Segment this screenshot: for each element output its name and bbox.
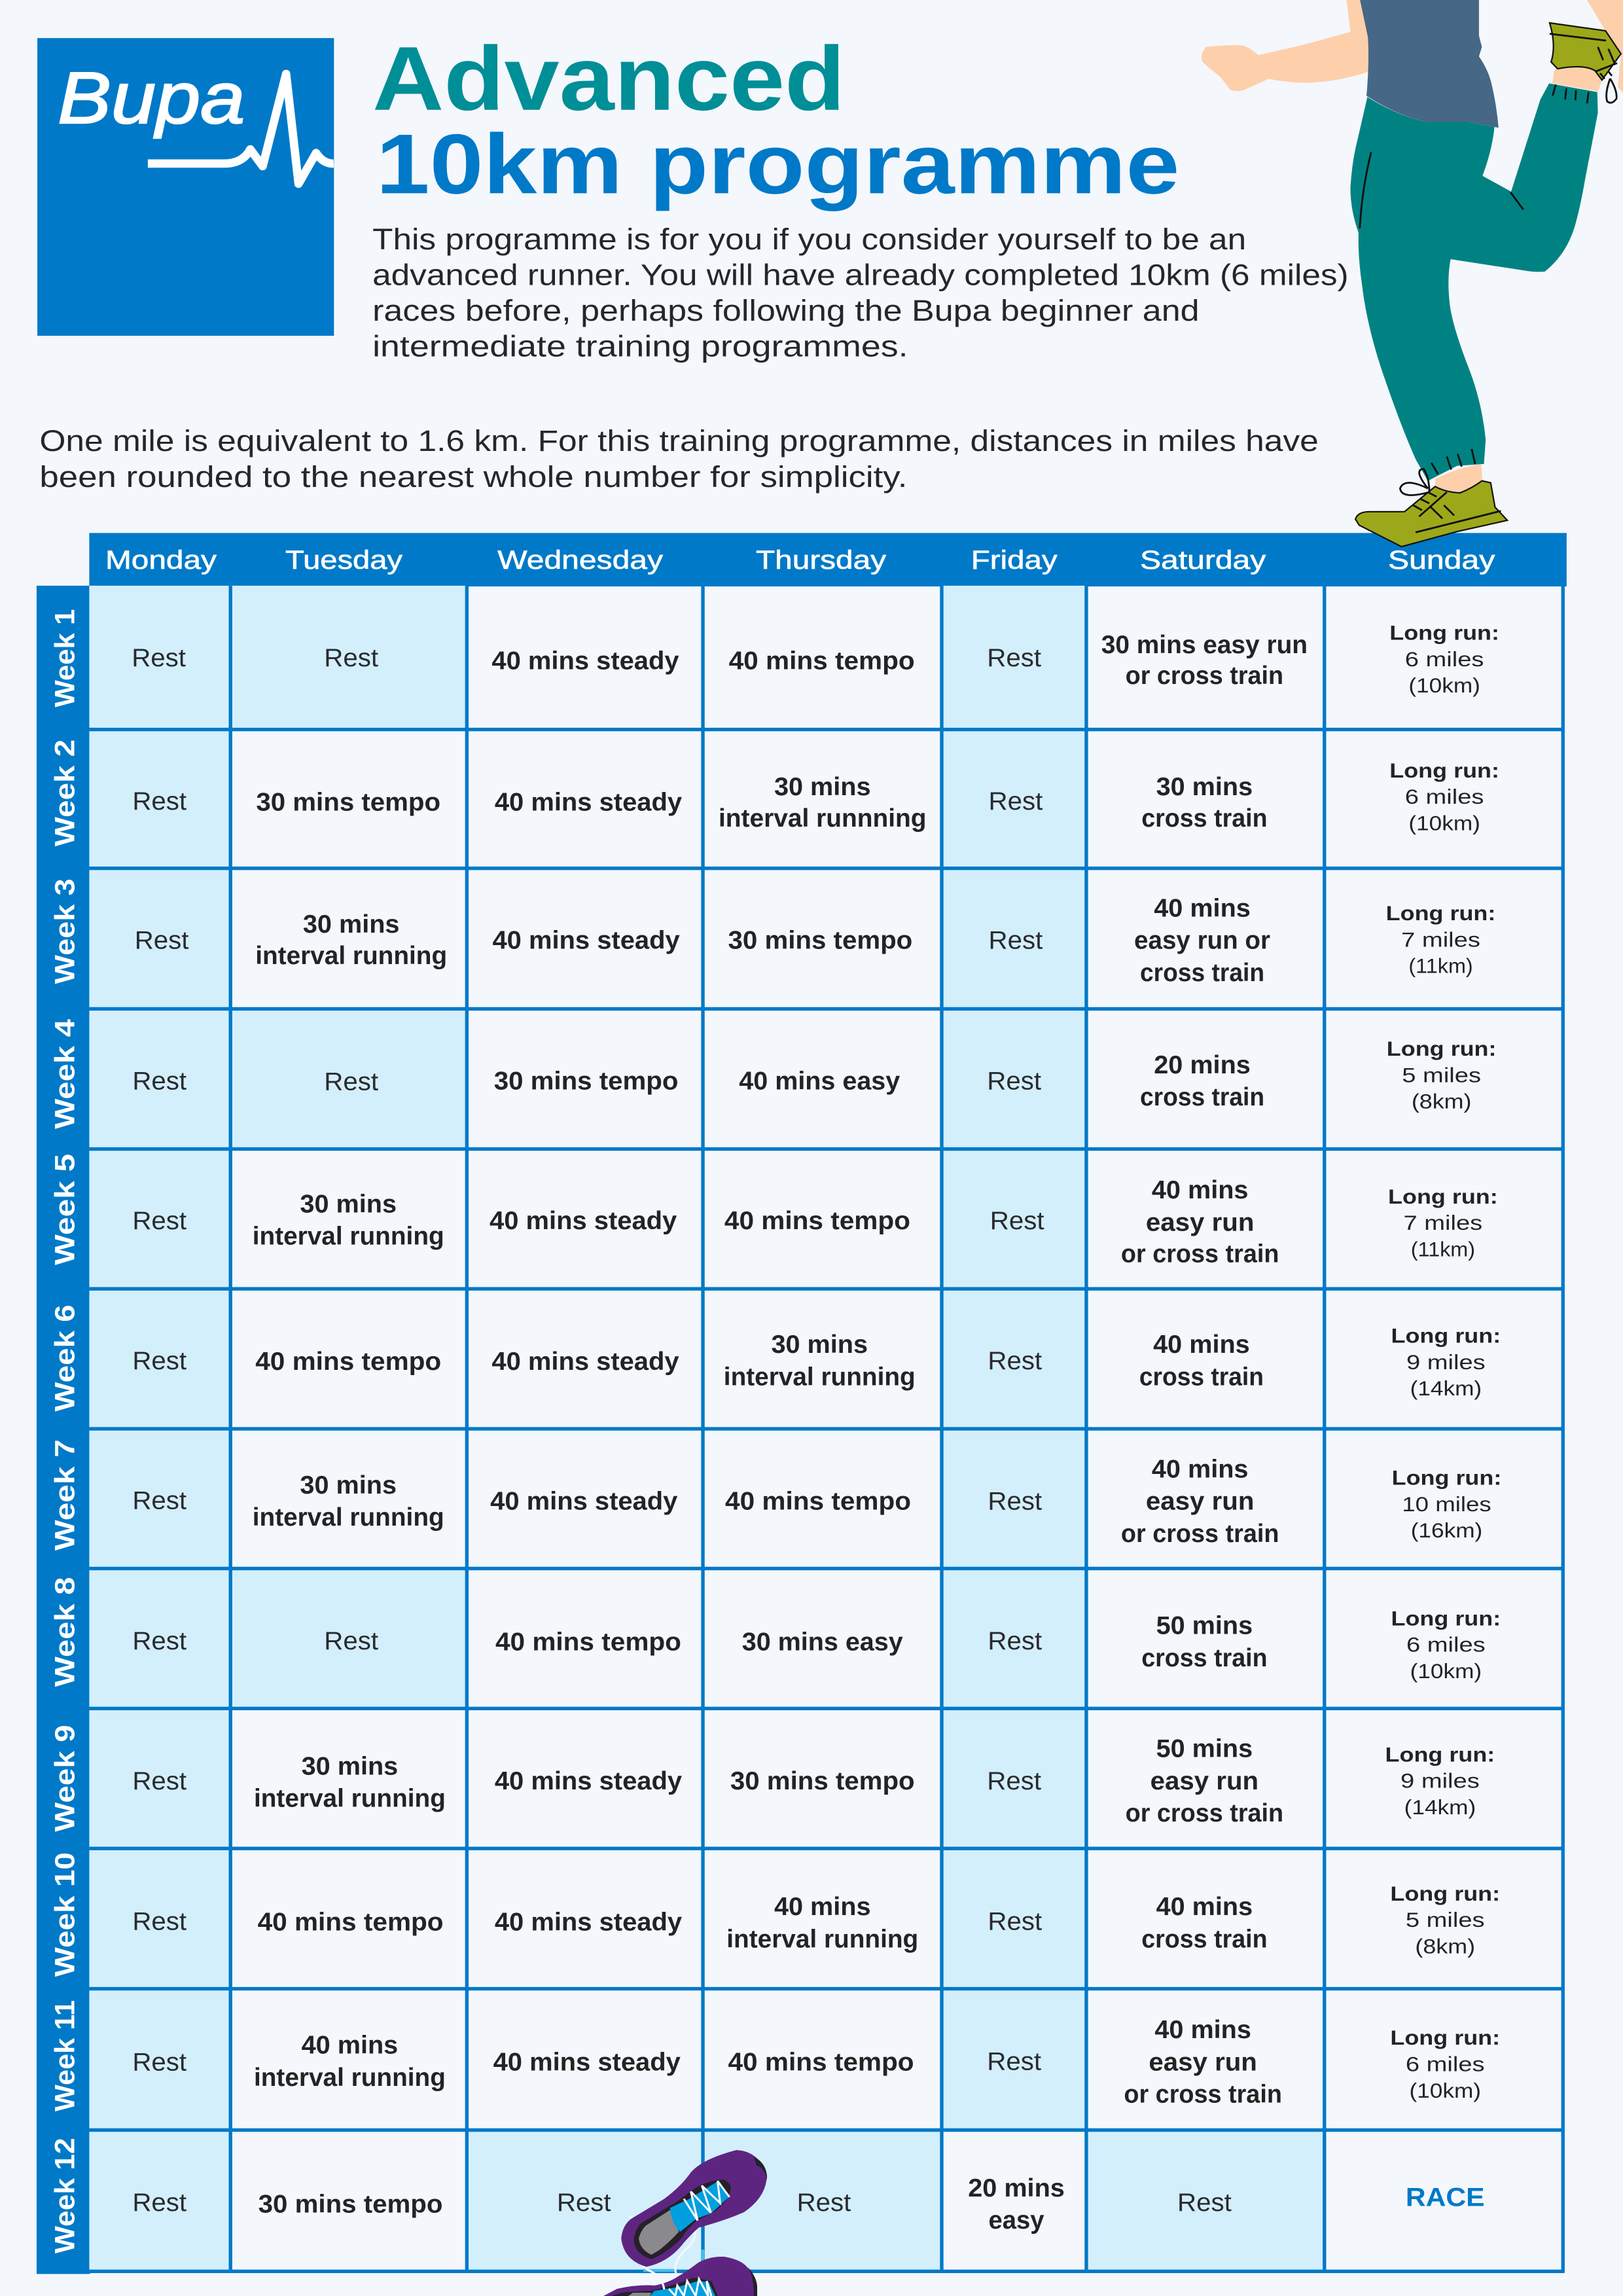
week labels column: Week 5	[50, 1154, 81, 1265]
row: week 11: 40 mins	[302, 2032, 398, 2060]
week labels column: Week 4	[50, 1019, 81, 1129]
week labels column	[37, 586, 90, 2274]
row: week 2: 30 mins	[1156, 773, 1253, 801]
row: week 7: 30 mins	[300, 1471, 397, 1499]
row: week 1: Rest	[324, 644, 378, 672]
row: week 10: Rest	[132, 1908, 187, 1936]
row: week 6: 40 mins	[1153, 1331, 1250, 1359]
row: week 2: 30 mins	[774, 773, 871, 801]
row: week 5: interval running	[253, 1223, 444, 1251]
row: week 7: Rest	[988, 1488, 1042, 1516]
row: week 2: Rest	[989, 787, 1043, 816]
row: week 10: 40 mins tempo	[258, 1909, 444, 1937]
row: week 11: easy run	[1149, 2048, 1257, 2076]
intro text: intermediate training programmes.	[372, 329, 908, 363]
row: week 8: Long run:	[1391, 1607, 1501, 1630]
row: week 12: 30 mins tempo	[259, 2190, 442, 2218]
row: week 4: (8km)	[1412, 1090, 1471, 1113]
row: week 10: interval running	[726, 1925, 918, 1953]
table header: Saturday	[1140, 545, 1266, 575]
week labels column: Week 9	[50, 1725, 81, 1832]
row: week 3: interval running	[255, 942, 447, 970]
row: week 5: 40 mins	[1152, 1176, 1248, 1204]
row: week 4: 20 mins	[1154, 1051, 1251, 1079]
table header	[89, 533, 1567, 586]
row: week 7: 10 miles	[1402, 1493, 1491, 1516]
week labels column: Week 11	[50, 2000, 81, 2111]
row: week 6: (14km)	[1410, 1377, 1482, 1400]
row: week 8: 50 mins	[1156, 1612, 1253, 1640]
row: week 8: (10km)	[1410, 1660, 1482, 1683]
row: week 6: Rest	[988, 1347, 1042, 1375]
week labels column: Week 6	[50, 1304, 81, 1412]
title: 10km programme	[376, 117, 1179, 211]
row: week 11: 40 mins steady	[493, 2048, 681, 2076]
row: week 4: 40 mins easy	[739, 1067, 900, 1095]
row: week 6: Rest	[132, 1347, 187, 1375]
row: week 12: Rest	[1177, 2189, 1232, 2217]
row: week 4	[132, 1037, 1497, 1113]
row: week 7: 40 mins	[1152, 1455, 1248, 1483]
row: week 6: interval running	[724, 1363, 916, 1391]
row: week 5	[132, 1176, 1498, 1268]
row: week 10	[132, 1882, 1500, 1958]
upper shoe	[621, 2150, 767, 2267]
row: week 3: 40 mins	[1154, 894, 1251, 922]
title: Advanced	[372, 28, 845, 130]
week labels column: Week 8	[50, 1577, 81, 1687]
row: week 8: Rest	[988, 1627, 1042, 1655]
illustration: runner legs	[1202, 0, 1623, 547]
row: week 11: interval running	[254, 2064, 446, 2092]
table header: Thursday	[756, 545, 887, 575]
row: week 6: cross train	[1139, 1363, 1264, 1391]
distance note: been rounded to the nearest whole number for simplicity.	[39, 459, 907, 493]
row: week 4: 5 miles	[1402, 1064, 1481, 1086]
row: week 11: (10km)	[1409, 2079, 1481, 2102]
row: week 4: Rest	[132, 1067, 187, 1095]
row: week 10: 5 miles	[1406, 1909, 1485, 1931]
row: week 2: 6 miles	[1405, 785, 1484, 808]
runner shirt	[1360, 0, 1499, 128]
lower shoe	[1355, 84, 1588, 547]
row: week 1: Long run:	[1389, 622, 1499, 645]
row: week 5: easy run	[1146, 1208, 1254, 1236]
row: week 6: 40 mins tempo	[255, 1348, 441, 1376]
runner trousers	[1350, 83, 1598, 481]
row: week 3: 7 miles	[1401, 928, 1480, 951]
row: week 7: Rest	[132, 1486, 187, 1515]
row: week 3: 30 mins	[303, 910, 399, 939]
lower shoe	[603, 2257, 757, 2296]
row: week 3: 40 mins steady	[492, 927, 680, 955]
row: week 1: 40 mins steady	[491, 647, 679, 675]
row: week 1: Rest	[132, 644, 186, 672]
row: week 9: interval running	[254, 1785, 446, 1813]
row: week 8	[132, 1607, 1501, 1683]
row: week 10: 40 mins	[774, 1893, 871, 1921]
intro text	[372, 222, 1349, 363]
row: week 9: Long run:	[1385, 1743, 1495, 1766]
row: week 6: 40 mins steady	[491, 1348, 679, 1376]
row: week 5: 40 mins steady	[490, 1207, 677, 1235]
row: week 7: or cross train	[1121, 1520, 1279, 1548]
row: week 3: Long run:	[1386, 902, 1495, 925]
row: week 10: 40 mins	[1156, 1893, 1253, 1921]
row: week 7: (16km)	[1411, 1519, 1482, 1542]
row: week 7: interval running	[253, 1503, 444, 1532]
illustration: running shoes	[603, 2150, 767, 2296]
runner lower ankle	[1435, 464, 1483, 499]
runner raised ankle	[1552, 65, 1602, 91]
row: week 4: cross train	[1140, 1083, 1264, 1111]
row: week 10: (8km)	[1415, 1935, 1475, 1958]
title	[372, 28, 1179, 211]
row: week 6: 30 mins	[771, 1331, 868, 1359]
row: week 6: 9 miles	[1406, 1351, 1486, 1374]
row: week 9: Rest	[132, 1767, 187, 1795]
week labels column: Week 12	[50, 2138, 81, 2253]
row: week 9: (14km)	[1404, 1796, 1476, 1819]
row: week 5: Long run:	[1388, 1185, 1498, 1208]
row: week 5: 7 miles	[1404, 1211, 1482, 1234]
row: week 11: Rest	[132, 2048, 187, 2076]
row: week 5: or cross train	[1121, 1240, 1279, 1268]
row: week 7	[132, 1455, 1501, 1548]
row: week 5: Rest	[990, 1207, 1044, 1235]
row: week 9: 50 mins	[1156, 1735, 1253, 1763]
row: week 12: Rest	[797, 2189, 851, 2217]
week labels column: Week 2	[50, 740, 81, 846]
row: week 3: (11km)	[1408, 955, 1473, 978]
row: week 4: Long run:	[1387, 1037, 1497, 1060]
table header: Monday	[105, 545, 217, 575]
row: week 11: 40 mins	[1154, 2016, 1251, 2044]
week labels column: Week 7	[50, 1439, 81, 1551]
row: week 12: Rest	[557, 2189, 611, 2217]
laces	[629, 2212, 695, 2289]
table header: Tuesday	[285, 545, 403, 575]
row: week 1: 30 mins easy run	[1101, 631, 1308, 659]
row: week 6	[132, 1325, 1501, 1400]
intro text: This programme is for you if you consider yourself to be an	[372, 222, 1246, 256]
week labels column: Week 10	[50, 1852, 81, 1977]
row: week 9: or cross train	[1126, 1799, 1283, 1827]
raised shoe	[1550, 23, 1621, 103]
row: week 12: easy	[989, 2206, 1044, 2234]
row: week 8: 6 miles	[1406, 1634, 1486, 1657]
row: week 4: Rest	[324, 1068, 378, 1096]
row: week 2: Long run:	[1389, 759, 1499, 782]
table header: Wednesday	[497, 545, 664, 575]
runner arm	[1202, 0, 1370, 91]
row: week 10: Rest	[988, 1908, 1042, 1936]
logo: Bupa	[37, 38, 334, 336]
row: week 2: interval runnning	[719, 804, 927, 833]
row: week 3: Rest	[135, 927, 189, 955]
row: week 1: (10km)	[1408, 674, 1480, 697]
row: week 7: 40 mins tempo	[725, 1488, 911, 1516]
row: week 2: 40 mins steady	[495, 788, 682, 816]
intro text: advanced runner. You will have already completed 10km (6 miles)	[372, 258, 1349, 292]
row: week 9: Rest	[987, 1767, 1041, 1795]
row: week 8: 30 mins easy	[742, 1628, 903, 1656]
row: week 3: 30 mins tempo	[728, 927, 912, 955]
row: week 9: 40 mins steady	[495, 1767, 682, 1795]
row: week 12: Rest	[132, 2189, 187, 2217]
row: week 8: Rest	[132, 1627, 187, 1655]
row: week 2: (10km)	[1408, 812, 1480, 834]
row: week 9	[132, 1735, 1495, 1827]
row: week 7: Long run:	[1392, 1467, 1501, 1490]
row: week 7: 40 mins steady	[490, 1488, 678, 1516]
row: week 1	[132, 622, 1499, 697]
row: week 11	[132, 2016, 1500, 2109]
row: week 12: RACE	[1406, 2182, 1485, 2212]
row: week 7: easy run	[1146, 1488, 1254, 1516]
table header: Sunday	[1388, 545, 1495, 575]
row: week 11: or cross train	[1124, 2081, 1282, 2109]
row: week 5: (11km)	[1411, 1238, 1475, 1261]
row: week 10: 40 mins steady	[495, 1909, 682, 1937]
row: week 3: easy run or	[1134, 927, 1270, 955]
row: week 3: Rest	[989, 927, 1043, 955]
distance note	[39, 423, 1319, 493]
row: week 1: 40 mins tempo	[729, 647, 915, 675]
row: week 6: Long run:	[1391, 1325, 1501, 1348]
row: week 8: cross train	[1141, 1644, 1268, 1672]
row: week 2: 30 mins tempo	[256, 788, 440, 816]
row: week 12: 20 mins	[968, 2174, 1065, 2202]
week labels column: Week 1	[50, 609, 81, 708]
row: week 1: 6 miles	[1405, 648, 1484, 671]
row: week 9: 9 miles	[1400, 1770, 1480, 1793]
table header: Friday	[971, 545, 1058, 575]
row: week 11: Rest	[987, 2047, 1041, 2075]
intro text: races before, perhaps following the Bupa beginner and	[372, 293, 1200, 327]
runner hand top right	[1587, 0, 1623, 93]
logo: Bupa: Bupa	[58, 57, 245, 139]
row: week 4: 30 mins tempo	[494, 1067, 678, 1095]
row: week 10: cross train	[1141, 1925, 1268, 1953]
row: week 8: Rest	[324, 1627, 378, 1655]
row: week 12	[132, 2174, 1485, 2234]
row: week 3: cross train	[1140, 959, 1264, 987]
row: week 5: 30 mins	[300, 1190, 397, 1218]
row: week 11: Long run:	[1390, 2026, 1500, 2049]
row: week 9: easy run	[1150, 1767, 1258, 1795]
row: week 5: Rest	[132, 1207, 187, 1235]
row: week 3	[135, 894, 1495, 987]
row: week 2: Rest	[132, 787, 187, 816]
distance note: One mile is equivalent to 1.6 km. For this training programme, distances in miles have	[39, 423, 1319, 457]
rest day shading	[89, 586, 1325, 2272]
row: week 2: cross train	[1141, 804, 1268, 833]
row: week 10: Long run:	[1390, 1882, 1500, 1905]
row: week 11: 6 miles	[1406, 2053, 1485, 2076]
row: week 4: Rest	[987, 1067, 1041, 1095]
shoe lace shadow line	[643, 2250, 703, 2270]
row: week 1: or cross train	[1126, 662, 1283, 690]
row: week 9: 30 mins tempo	[730, 1767, 915, 1795]
row: week 1: Rest	[987, 644, 1041, 672]
row: week 9: 30 mins	[302, 1752, 398, 1780]
row: week 11: 40 mins tempo	[728, 2048, 914, 2076]
row: week 5: 40 mins tempo	[724, 1207, 910, 1235]
row: week 8: 40 mins tempo	[495, 1628, 681, 1656]
row: week 2	[132, 759, 1499, 834]
week labels column: Week 3	[50, 878, 81, 984]
